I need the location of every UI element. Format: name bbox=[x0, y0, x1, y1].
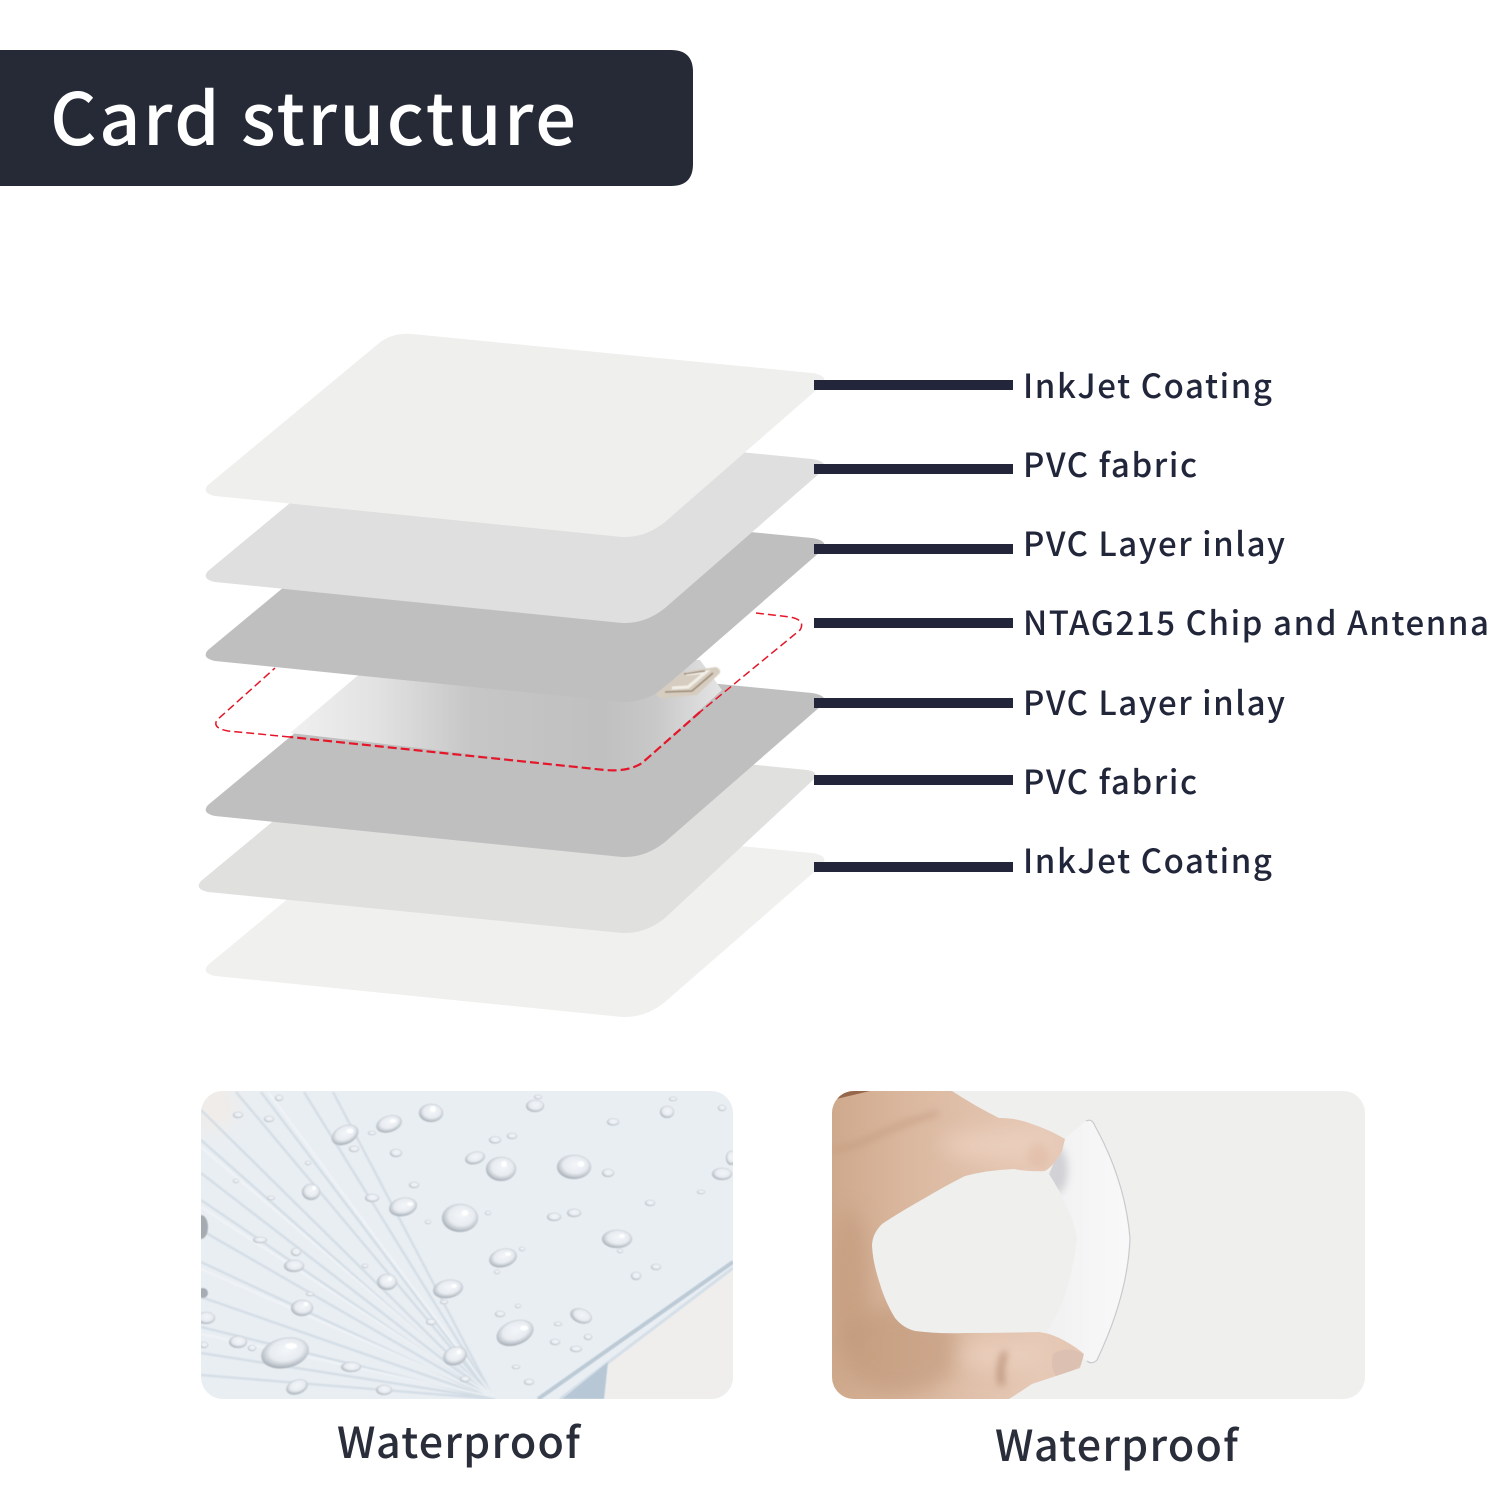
label: PVC Layer inlay: PVC Layer inlay bbox=[1023, 677, 1285, 725]
hand bbox=[832, 1091, 1092, 1399]
caption: right Waterproof: Waterproof bbox=[995, 1412, 1240, 1474]
fanned card edges bbox=[201, 1092, 494, 1399]
label: PVC fabric: PVC fabric bbox=[1023, 439, 1197, 487]
thumbnail bbox=[1052, 1350, 1084, 1376]
layer: lower PVC inlay bbox=[206, 654, 824, 857]
icon: NFC chip bbox=[657, 667, 720, 698]
layered card diagram bbox=[199, 334, 824, 1017]
leader lines bbox=[814, 380, 1013, 872]
label: InkJet Coating: InkJet Coating bbox=[1023, 360, 1272, 408]
layer: upper PVC inlay bbox=[206, 499, 824, 702]
white background corner bbox=[604, 1270, 733, 1399]
antenna dashed outline bbox=[216, 613, 802, 770]
label: NTAG215 Chip and Antenna: NTAG215 Chip and Antenna bbox=[1023, 597, 1489, 645]
water droplets bbox=[194, 1095, 736, 1397]
title text: Card structure bbox=[50, 61, 576, 166]
photo: hand bending a card bbox=[832, 1091, 1365, 1399]
layer: chip and antenna sheet bbox=[290, 650, 722, 770]
label: PVC fabric: PVC fabric bbox=[1023, 756, 1197, 804]
layer: lower PVC fabric bbox=[199, 730, 816, 933]
caption: left Waterproof: Waterproof bbox=[337, 1409, 582, 1471]
layer: upper PVC fabric bbox=[206, 420, 824, 623]
flexible card bbox=[1044, 1120, 1130, 1363]
layer labels bbox=[1023, 360, 1489, 883]
label: PVC Layer inlay: PVC Layer inlay bbox=[1023, 518, 1285, 566]
title banner bbox=[0, 50, 693, 186]
photo: water droplets on cards bbox=[193, 1077, 736, 1399]
card stack edge bbox=[538, 1262, 733, 1399]
layer: bottom inkjet coating bbox=[206, 814, 824, 1017]
label: InkJet Coating: InkJet Coating bbox=[1023, 835, 1272, 883]
layer: top inkjet coating bbox=[206, 334, 824, 537]
